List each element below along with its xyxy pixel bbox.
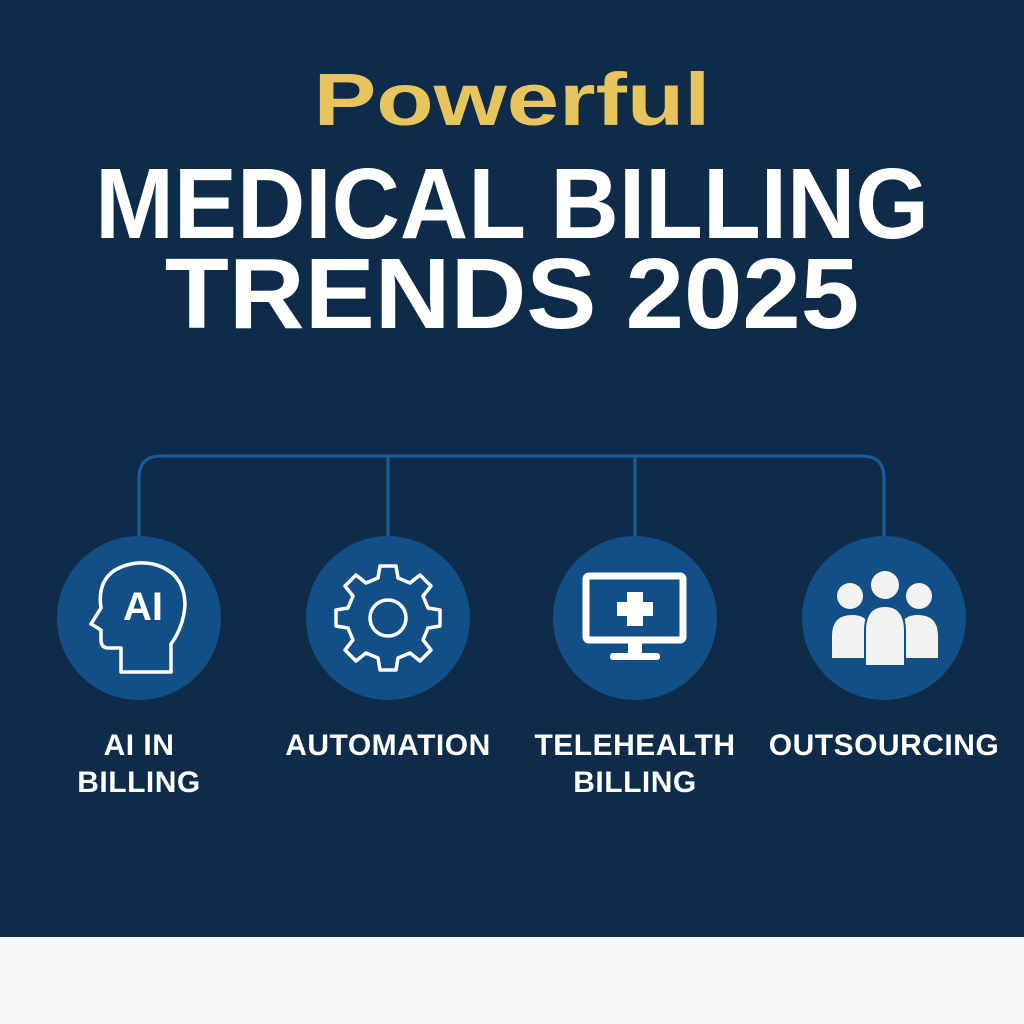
title: MEDICAL BILLING TRENDS 2025: MEDICAL BILLING bbox=[95, 148, 929, 260]
icon: gear bbox=[306, 536, 470, 700]
label: automation: AUTOMATION bbox=[285, 729, 491, 762]
title: MEDICAL BILLING TRENDS 2025 bbox=[95, 148, 929, 350]
title: Powerful: Powerful bbox=[314, 58, 710, 141]
icon: AI head bbox=[57, 536, 221, 700]
icon: people bbox=[802, 536, 966, 700]
label: telehealth billing: TELEHEALTH bbox=[534, 729, 736, 762]
label: AI in billing: AI IN bbox=[104, 729, 174, 762]
title: MEDICAL BILLING TRENDS 2025: TRENDS 2025 bbox=[165, 238, 859, 350]
label: telehealth billing bbox=[534, 729, 736, 799]
label: outsourcing: OUTSOURCING bbox=[769, 729, 999, 762]
icon: AI head: AI bbox=[123, 585, 163, 629]
label: AI in billing: BILLING bbox=[77, 766, 201, 799]
label: AI in billing bbox=[77, 729, 201, 799]
label: telehealth billing: BILLING bbox=[573, 766, 697, 799]
icon: telehealth monitor bbox=[553, 536, 717, 700]
